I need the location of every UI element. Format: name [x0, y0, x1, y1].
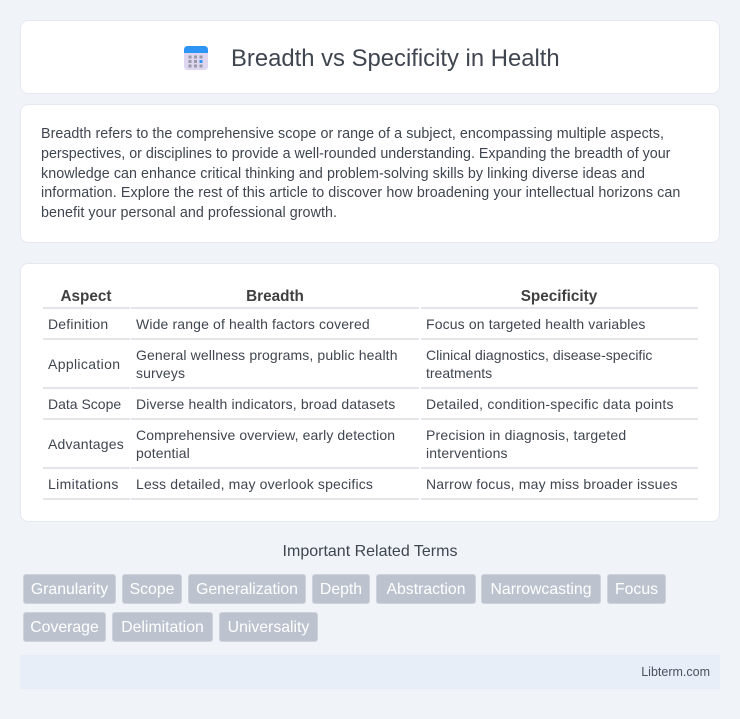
tag: Generalization [196, 581, 298, 598]
row: advantages: Comprehensive overview, early detection [136, 427, 395, 443]
text block: intro: information. Explore the rest of this article to discover how broadening your intellectual horizons can [41, 185, 680, 201]
table header: Breadth [246, 288, 304, 305]
tag: Depth [320, 581, 362, 598]
row: data scope: Diverse health indicators, broad datasets [136, 396, 395, 412]
panel: title header [20, 20, 720, 94]
row: data scope: Data Scope [48, 396, 121, 412]
row: advantages: potential [136, 445, 190, 461]
text block: intro: perspectives, or disciplines to provide a well-rounded understanding. Expanding the breadth of your [41, 146, 670, 162]
tag [188, 574, 306, 604]
row: application: treatments [426, 365, 492, 381]
row: advantages: interventions [426, 445, 508, 461]
row: advantages: Advantages [48, 436, 124, 452]
row: definition: Focus on targeted health variables [426, 316, 646, 332]
tag [312, 574, 370, 604]
text block: intro: Breadth refers to the comprehensive scope or range of a subject, encompassing multiple aspects, [41, 126, 664, 142]
tag: Universality [228, 619, 309, 636]
row: limitations [48, 476, 678, 492]
row: data scope: Detailed, condition-specific data points [426, 396, 674, 412]
icon: calendar [184, 46, 208, 70]
tag [23, 612, 106, 642]
text block: intro [41, 126, 680, 221]
row: definition: Definition [48, 316, 108, 332]
tag [376, 574, 476, 604]
row: advantages [48, 427, 626, 461]
row: limitations: Less detailed, may overlook specifics [136, 476, 373, 492]
text block: intro: benefit your personal and professional growth. [41, 205, 337, 221]
row: limitations: Narrow focus, may miss broader issues [426, 476, 678, 492]
text block: intro: knowledge can enhance critical thinking and problem-solving skills by linking diverse ideas and [41, 166, 645, 182]
row: data scope [48, 396, 674, 412]
footer source: Libterm.com [641, 665, 710, 679]
footer bar [20, 655, 720, 689]
tag [23, 574, 116, 604]
row: application: Clinical diagnostics, disease-specific [426, 347, 652, 363]
table header [60, 288, 598, 305]
panel: intro paragraph [20, 104, 720, 243]
tag list: related terms [23, 574, 666, 642]
row: limitations: Limitations [48, 476, 119, 492]
row: advantages: Precision in diagnosis, targeted [426, 427, 626, 443]
tag: Scope [130, 581, 174, 598]
row: application: surveys [136, 365, 185, 381]
row: definition [48, 316, 646, 332]
tag: Focus [615, 581, 658, 598]
table header: Specificity [521, 288, 597, 305]
row: application: General wellness programs, public health [136, 347, 398, 363]
tag: Delimitation [121, 619, 204, 636]
row: application: Application [48, 356, 120, 372]
tag [112, 612, 213, 642]
panel: comparison table [20, 263, 720, 522]
row: application [48, 347, 652, 381]
tag: Narrowcasting [491, 581, 591, 598]
tag: Coverage [30, 619, 99, 636]
heading: related terms: Important Related Terms [283, 543, 457, 560]
title: Breadth vs Specificity in Health [231, 45, 560, 72]
row: definition: Wide range of health factors covered [136, 316, 370, 332]
table header: Aspect [60, 288, 112, 305]
tag: Abstraction [386, 581, 466, 598]
tag [481, 574, 601, 604]
tag [122, 574, 182, 604]
tag: Granularity [31, 581, 108, 598]
tag [607, 574, 666, 604]
tag [219, 612, 318, 642]
